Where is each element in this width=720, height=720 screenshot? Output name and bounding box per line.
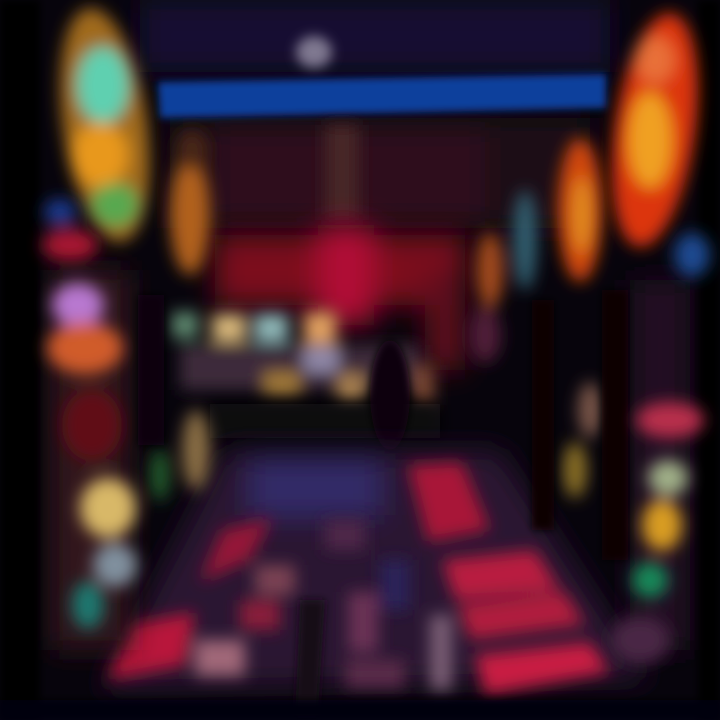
- dark counter base: [210, 404, 440, 438]
- left haze: [50, 270, 130, 650]
- left dark edge: [0, 0, 40, 720]
- left lantern: [47, 2, 163, 248]
- right lantern: [599, 8, 711, 252]
- bottom dark edge: [0, 700, 720, 720]
- floor: [100, 450, 650, 690]
- right haze: [630, 280, 690, 650]
- blue banner: [158, 74, 606, 118]
- silhouette figure: [370, 340, 410, 450]
- right dark pillars: [532, 290, 628, 560]
- right dark edge: [698, 0, 720, 720]
- left second lantern: [170, 130, 210, 275]
- right inner lights: [469, 190, 602, 498]
- floor red carpet panels: [108, 462, 610, 695]
- red back wall: [215, 225, 465, 370]
- ceiling light: [296, 36, 332, 68]
- floor dark lines: [295, 600, 325, 715]
- left dark pillar: [138, 295, 164, 445]
- counter with lights: [172, 312, 434, 405]
- left machine column: [42, 199, 210, 629]
- ceiling: [140, 0, 610, 228]
- hanging column: [325, 125, 359, 220]
- right machine column: [610, 233, 710, 664]
- right second lantern: [558, 138, 602, 282]
